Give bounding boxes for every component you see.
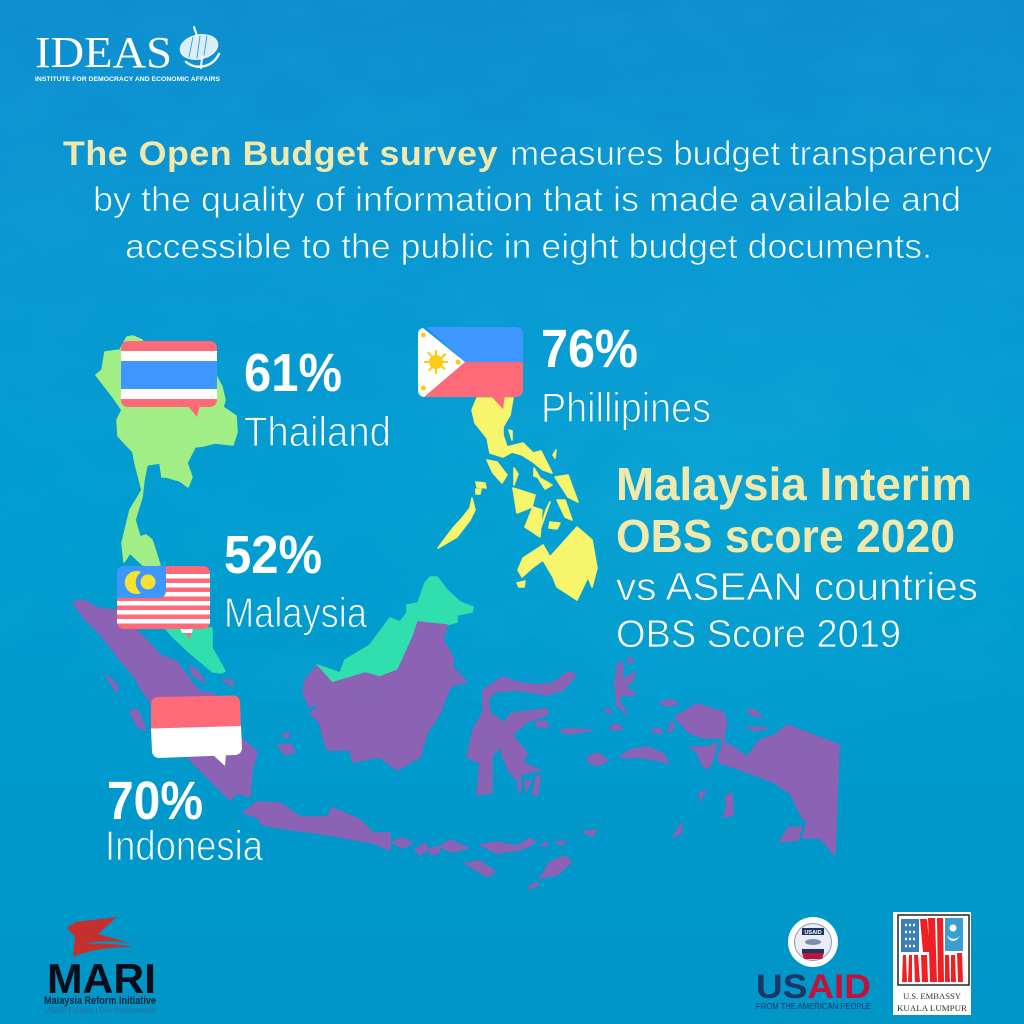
icon: MARI red flag bird bbox=[67, 917, 133, 957]
logo: U.S. Embassy Kuala Lumpur: U.S. EMBASSY bbox=[903, 991, 961, 1001]
stat: Thailand 61%: 61% bbox=[244, 343, 342, 403]
stat: Indonesia 70% bbox=[105, 771, 264, 869]
stat: Malaysia 52% bbox=[224, 525, 368, 636]
map: Philippines bbox=[438, 398, 597, 600]
icon: USAID seal: USAID bbox=[804, 930, 822, 936]
heading paragraph: accessible to the public in eight budget documents. bbox=[125, 228, 932, 266]
logo: MARI bbox=[44, 917, 156, 1015]
flag callout: Philippines bbox=[418, 327, 523, 409]
heading paragraph: The Open Budget survey bbox=[63, 135, 498, 173]
heading paragraph bbox=[63, 135, 992, 266]
stat: Indonesia 70%: Indonesia bbox=[105, 822, 264, 869]
flag callout: Malaysia bbox=[117, 566, 210, 639]
stat: Malaysia 52%: Malaysia bbox=[224, 589, 368, 636]
logo: MARI: Malaysia Reform Initiative bbox=[44, 995, 156, 1007]
stat: Philippines 76%: 76% bbox=[541, 319, 638, 379]
stat: Malaysia 52%: 52% bbox=[224, 525, 322, 585]
logo: USAID: FROM THE AMERICAN PEOPLE bbox=[756, 1001, 871, 1011]
map: Thailand bbox=[96, 336, 237, 567]
stat: Thailand 61%: Thailand bbox=[244, 408, 391, 455]
chart title: Malaysia Interim bbox=[616, 458, 972, 510]
logo: MARI: MARI bbox=[47, 955, 156, 1002]
logo: USAID bbox=[756, 917, 871, 1011]
stat: Philippines 76%: Phillipines bbox=[541, 384, 711, 431]
chart title: OBS score 2020 bbox=[616, 510, 955, 562]
logo: MARI: USAID Funded | DAI Implemented bbox=[44, 1005, 156, 1015]
map: Southeast Asia bbox=[73, 336, 839, 889]
chart title: OBS Score 2019 bbox=[616, 613, 901, 656]
stat: Thailand 61% bbox=[244, 343, 391, 455]
stat: Philippines 76% bbox=[541, 319, 711, 431]
heading paragraph: measures budget transparency bbox=[510, 135, 992, 173]
flag callout: Indonesia bbox=[151, 696, 242, 766]
stat: Indonesia 70%: 70% bbox=[107, 771, 203, 831]
flag callout: Thailand bbox=[121, 341, 217, 417]
map: Malaysia bbox=[165, 577, 473, 683]
chart title: vs ASEAN countries bbox=[616, 566, 978, 609]
logo: IDEAS bbox=[35, 27, 221, 83]
map: Indonesia bbox=[73, 600, 839, 889]
logo: U.S. Embassy Kuala Lumpur bbox=[893, 912, 971, 1015]
heading paragraph: by the quality of information that is made available and bbox=[93, 181, 961, 219]
logo: USAID: USAID bbox=[756, 968, 871, 1006]
chart title bbox=[616, 458, 978, 656]
logo: IDEAS: INSTITUTE FOR DEMOCRACY AND ECONOMIC AFFAIRS bbox=[35, 76, 221, 83]
logo: U.S. Embassy Kuala Lumpur: KUALA LUMPUR bbox=[897, 1003, 967, 1013]
logo: IDEAS: IDEAS bbox=[35, 28, 172, 77]
icon: IDEAS bird globe bbox=[178, 27, 220, 68]
